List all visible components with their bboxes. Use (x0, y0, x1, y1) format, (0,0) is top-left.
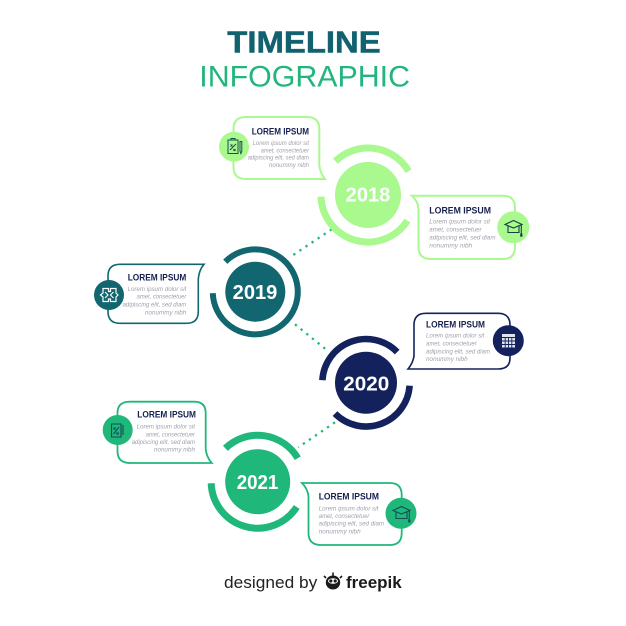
title line: timeline: TIMELINE (227, 25, 381, 60)
year disc 2021 (225, 449, 290, 514)
milestone: 2018 (321, 148, 409, 242)
body text: nonummy nibh (145, 309, 187, 316)
year label 2020: 2020 (343, 374, 389, 396)
callout: 2018 right (412, 196, 529, 259)
body text (132, 424, 196, 454)
icon badge: puzzle pieces (94, 280, 124, 310)
speech bubble (412, 196, 515, 259)
icon: freepik bee (324, 572, 342, 590)
heading: LOREM IPSUM (319, 492, 379, 502)
freepik wordmark: freepik (346, 573, 402, 592)
icon badge: calendar (493, 325, 524, 356)
body text (248, 140, 310, 169)
speech bubble (408, 313, 510, 369)
body text: Lorem ipsum dolor sit (253, 140, 310, 147)
body text: Lorem ipsum dolor sit (319, 505, 380, 512)
dotted connector: 2019 to 2020 (295, 324, 327, 350)
dotted connector: 2018 to 2019 (292, 229, 332, 256)
body text: adipiscing elit, sed diam (429, 234, 496, 241)
body text: amet, consectetuer (137, 294, 187, 301)
body text: adipiscing elit, sed diam (319, 521, 385, 528)
milestone: 2020 (322, 339, 410, 426)
heading: LOREM IPSUM (128, 273, 186, 283)
icon badge: clipboard plan (219, 132, 249, 162)
body text: nonummy nibh (269, 162, 309, 169)
milestone: 2019 (213, 249, 298, 334)
speech bubble (234, 117, 325, 179)
callout: 2018 left (219, 117, 325, 179)
body text: amet, consectetuer (319, 513, 370, 520)
heading: LOREM IPSUM (426, 320, 485, 330)
body text: adipiscing elit, sed diam (426, 348, 491, 355)
designed by label: designed by (224, 574, 318, 592)
body text (123, 286, 187, 316)
speech bubble (118, 402, 212, 463)
title (199, 25, 410, 94)
body text: adipiscing elit, sed diam (132, 439, 196, 446)
heading: LOREM IPSUM (429, 205, 491, 215)
heading: LOREM IPSUM (137, 410, 196, 420)
milestone: 2021 (211, 435, 298, 528)
body text: amet, consectetuer (146, 431, 196, 438)
year disc 2018 (335, 162, 401, 228)
icon badge: clipboard plan (103, 415, 133, 445)
body text: nonummy nibh (426, 356, 468, 363)
body text: nonummy nibh (154, 447, 195, 454)
footer credit (224, 572, 402, 592)
body text (319, 505, 385, 535)
callout: 2021 left (103, 402, 212, 463)
body text: Lorem ipsum dolor sit (426, 333, 485, 340)
icon badge: graduation cap (386, 498, 416, 529)
body text: amet, consectetuer (426, 341, 477, 348)
speech bubble (302, 483, 402, 545)
callout: 2020 (408, 313, 524, 369)
heading: LOREM IPSUM (252, 127, 309, 137)
year label 2021: 2021 (237, 472, 278, 494)
speech bubble (108, 264, 204, 323)
body text: nonummy nibh (319, 528, 361, 535)
body text: adipiscing elit, sed diam (123, 301, 187, 308)
body text: adipiscing elit, sed diam (248, 155, 310, 162)
year label 2018: 2018 (346, 185, 390, 207)
dotted connector: 2020 to 2021 (298, 422, 335, 447)
body text: amet, consectetuer (429, 226, 482, 233)
year disc 2020 (335, 352, 397, 414)
ring arc 2019 (213, 249, 298, 334)
title line: infographic: INFOGRAPHIC (199, 61, 410, 94)
callout: 2021 right (302, 483, 416, 545)
ring arcs 2018 (321, 148, 409, 242)
body text: amet, consectetuer (261, 147, 310, 154)
callout: 2019 (94, 264, 204, 323)
ring arcs 2020 (322, 339, 410, 426)
body text: Lorem ipsum dolor sit (128, 286, 187, 293)
body text: nonummy nibh (429, 242, 473, 249)
body text: Lorem ipsum dolor sit (137, 424, 196, 431)
year label 2019: 2019 (233, 282, 277, 304)
body text: Lorem ipsum dolor sit (429, 218, 491, 225)
body text (429, 218, 496, 249)
body text (426, 333, 491, 363)
year disc 2019 (225, 262, 285, 322)
ring arcs 2021 (211, 435, 298, 528)
icon badge: graduation cap (497, 211, 529, 243)
